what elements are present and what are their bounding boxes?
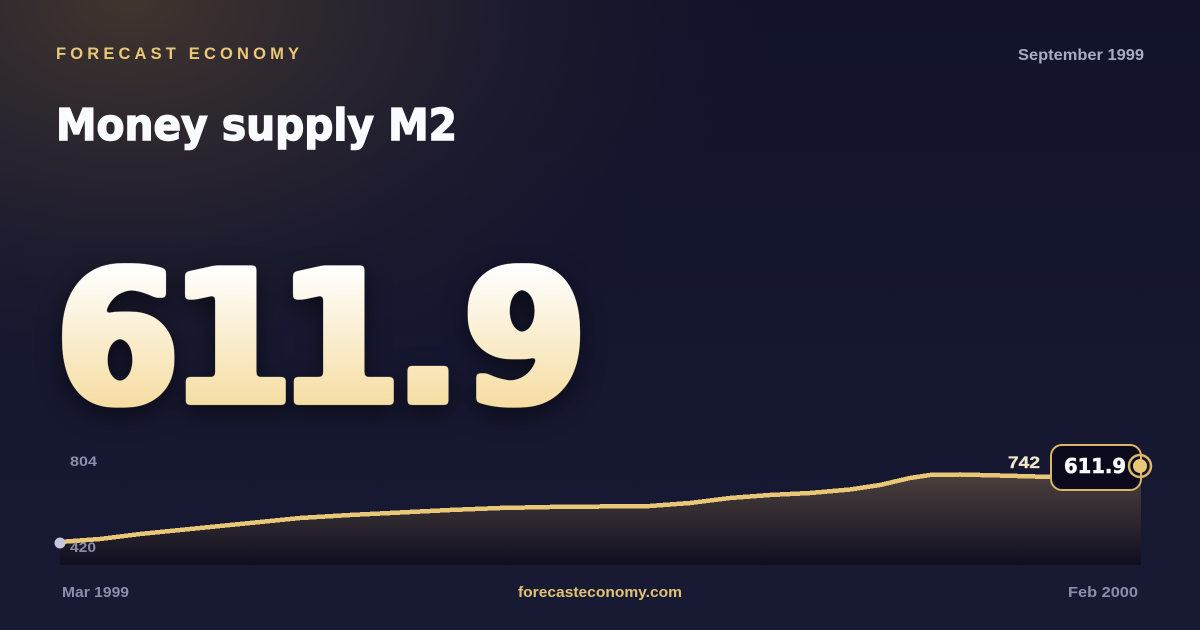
peak value label: 742 xyxy=(1008,453,1040,472)
brand eyebrow: FORECAST ECONOMY xyxy=(56,45,299,63)
current value badge: 611.9 xyxy=(1064,454,1126,478)
area fill xyxy=(60,474,1141,565)
chart xyxy=(54,445,1151,565)
start date label: Mar 1999 xyxy=(62,584,129,601)
axis max label: 804 xyxy=(70,453,97,469)
title: Money supply M2 xyxy=(56,100,457,151)
current value badge xyxy=(1051,445,1141,490)
big value: 611.9 xyxy=(56,231,586,447)
end date label: Feb 2000 xyxy=(1068,584,1138,601)
date label: September 1999 xyxy=(1018,47,1144,64)
current value marker xyxy=(1129,455,1151,477)
start marker xyxy=(54,538,66,548)
price line xyxy=(60,474,1052,542)
axis min label: 420 xyxy=(70,539,96,555)
website: forecasteconomy.com xyxy=(518,584,682,601)
